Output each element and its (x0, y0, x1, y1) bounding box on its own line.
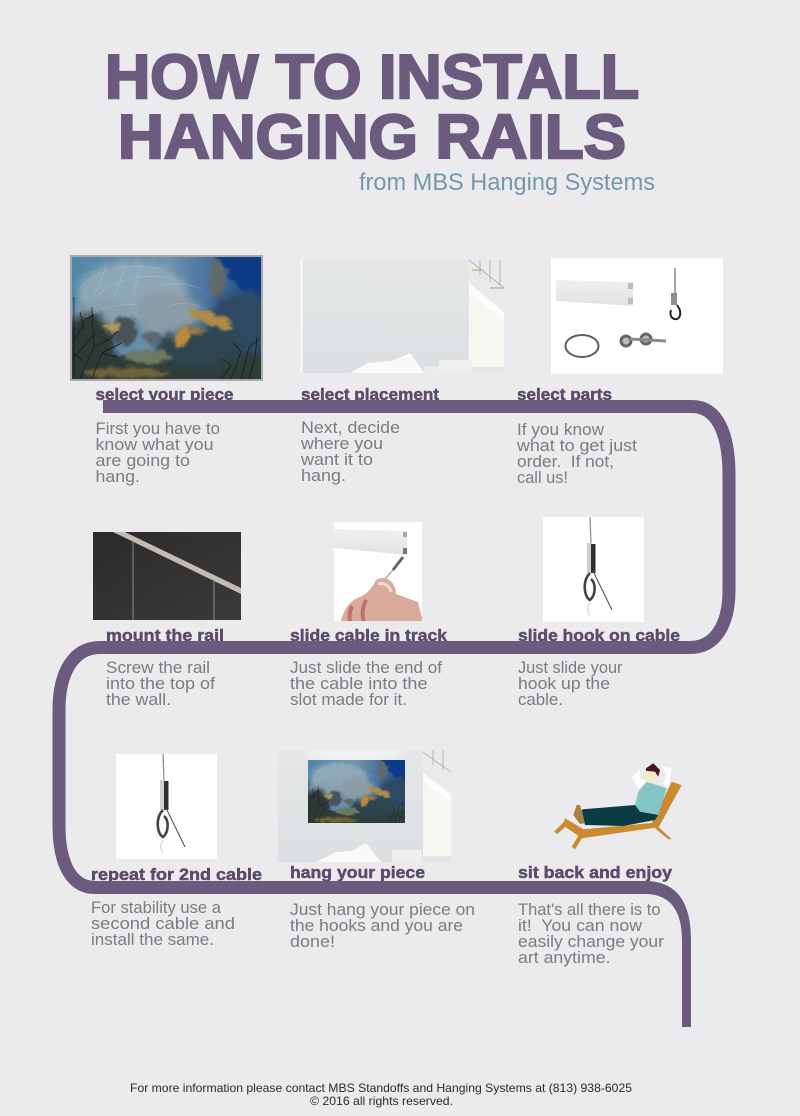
head (644, 767, 658, 783)
text block: sit back and enjoy (518, 900, 664, 967)
heading: select your piece: select your piece (96, 385, 234, 404)
winding path connecting the steps (59, 406, 729, 1027)
heading: hang your piece: hang your piece (290, 863, 425, 882)
text block: mount the rail (106, 658, 215, 709)
heading: select parts: select parts (517, 385, 612, 404)
title (105, 43, 639, 172)
text block: slide cable in track: slot made for it. (290, 690, 407, 709)
heading: slide cable in track: slide cable in track (290, 626, 448, 645)
foot (573, 805, 585, 824)
text block: sit back and enjoy: art anytime. (518, 948, 610, 967)
text block: slide hook on cable (518, 658, 623, 709)
text block: select placement: hang. (301, 466, 346, 485)
text block: hang your piece (290, 900, 475, 951)
hair (646, 763, 660, 777)
text block: slide cable in track: the cable into the (290, 674, 428, 693)
text block: repeat for 2nd cable: For stability use a (91, 898, 222, 917)
step 7: repeat for 2nd cable (91, 754, 262, 949)
text block: select your piece: First you have to (96, 419, 220, 438)
heading: mount the rail: mount the rail (106, 626, 224, 645)
text block: sit back and enjoy: it! You can now (518, 916, 643, 935)
step 8: hang your piece (278, 742, 475, 951)
text block: select placement: Next, decide (301, 418, 400, 437)
icon: person relaxing on lounger (554, 763, 682, 849)
text block: slide cable in track: Just slide the end of (290, 658, 442, 677)
photo: hook on cable (543, 517, 644, 622)
text block: slide hook on cable: Just slide your (518, 658, 623, 677)
text block: select parts: what to get just (516, 436, 637, 455)
photo: painting (62, 252, 275, 384)
title: HOW TO INSTALL (105, 43, 639, 112)
text block: select your piece (96, 419, 220, 486)
text block: select your piece: know what you (96, 435, 214, 454)
text block: repeat for 2nd cable: install the same. (91, 930, 214, 949)
text block: mount the rail: into the top of (106, 674, 215, 693)
step 1: select your piece (62, 252, 275, 486)
footer contact text: For more information please contact MBS Standoffs and Hanging Systems at (813) 938-6025 (130, 1081, 632, 1095)
text block: repeat for 2nd cable: second cable and (91, 914, 235, 933)
heading: select placement: select placement (301, 385, 439, 404)
text block: mount the rail: Screw the rail (106, 658, 210, 677)
text block: select placement: where you (300, 434, 383, 453)
photo: hand with cable (334, 522, 424, 625)
text block: repeat for 2nd cable (91, 898, 235, 949)
heading: slide hook on cable: slide hook on cable (518, 626, 680, 645)
text block: slide cable in track (290, 658, 442, 709)
step 3: select parts (516, 258, 723, 487)
subtitle: from MBS Hanging Systems (359, 169, 655, 196)
footer contact text: © 2016 all rights reserved. (310, 1094, 453, 1108)
text block: select parts: If you know (517, 420, 605, 439)
torso (635, 782, 667, 815)
arm right (662, 767, 672, 788)
text block: hang your piece: the hooks and you are (290, 916, 463, 935)
legs (582, 805, 658, 826)
text block: select parts: call us! (517, 468, 568, 487)
text block: select your piece: hang. (96, 467, 140, 486)
footer contact text (130, 1081, 632, 1108)
step 6: slide hook on cable (518, 517, 680, 709)
lounger frame (554, 782, 682, 849)
text block: select your piece: are going to (96, 451, 190, 470)
text block: hang your piece: Just hang your piece on (290, 900, 475, 919)
step 5: slide cable in track (290, 522, 448, 709)
arm left (632, 770, 647, 788)
photo: empty wall (300, 260, 504, 373)
text block: select placement (300, 418, 400, 485)
text block: hang your piece: done! (290, 932, 335, 951)
heading: repeat for 2nd cable: repeat for 2nd cable (91, 865, 262, 884)
text block: select parts: order. If not, (517, 452, 614, 471)
step 9: sit back and enjoy (518, 763, 682, 967)
step 2: select placement (300, 260, 504, 485)
text block: mount the rail: the wall. (106, 690, 171, 709)
text block: slide hook on cable: cable. (518, 690, 563, 709)
photo: rail on dark wall (93, 532, 241, 620)
photo: second hook (116, 754, 217, 859)
text block: sit back and enjoy: easily change your (518, 932, 664, 951)
text block: select parts (516, 420, 637, 487)
photo: parts (551, 258, 723, 374)
heading: sit back and enjoy: sit back and enjoy (518, 863, 673, 882)
text block: select placement: want it to (300, 450, 373, 469)
step 4: mount the rail (93, 532, 241, 709)
text block: sit back and enjoy: That's all there is to (518, 900, 660, 919)
photo: painting on wall (278, 742, 451, 862)
title: HANGING RAILS (118, 103, 626, 172)
text block: slide hook on cable: hook up the (518, 674, 610, 693)
